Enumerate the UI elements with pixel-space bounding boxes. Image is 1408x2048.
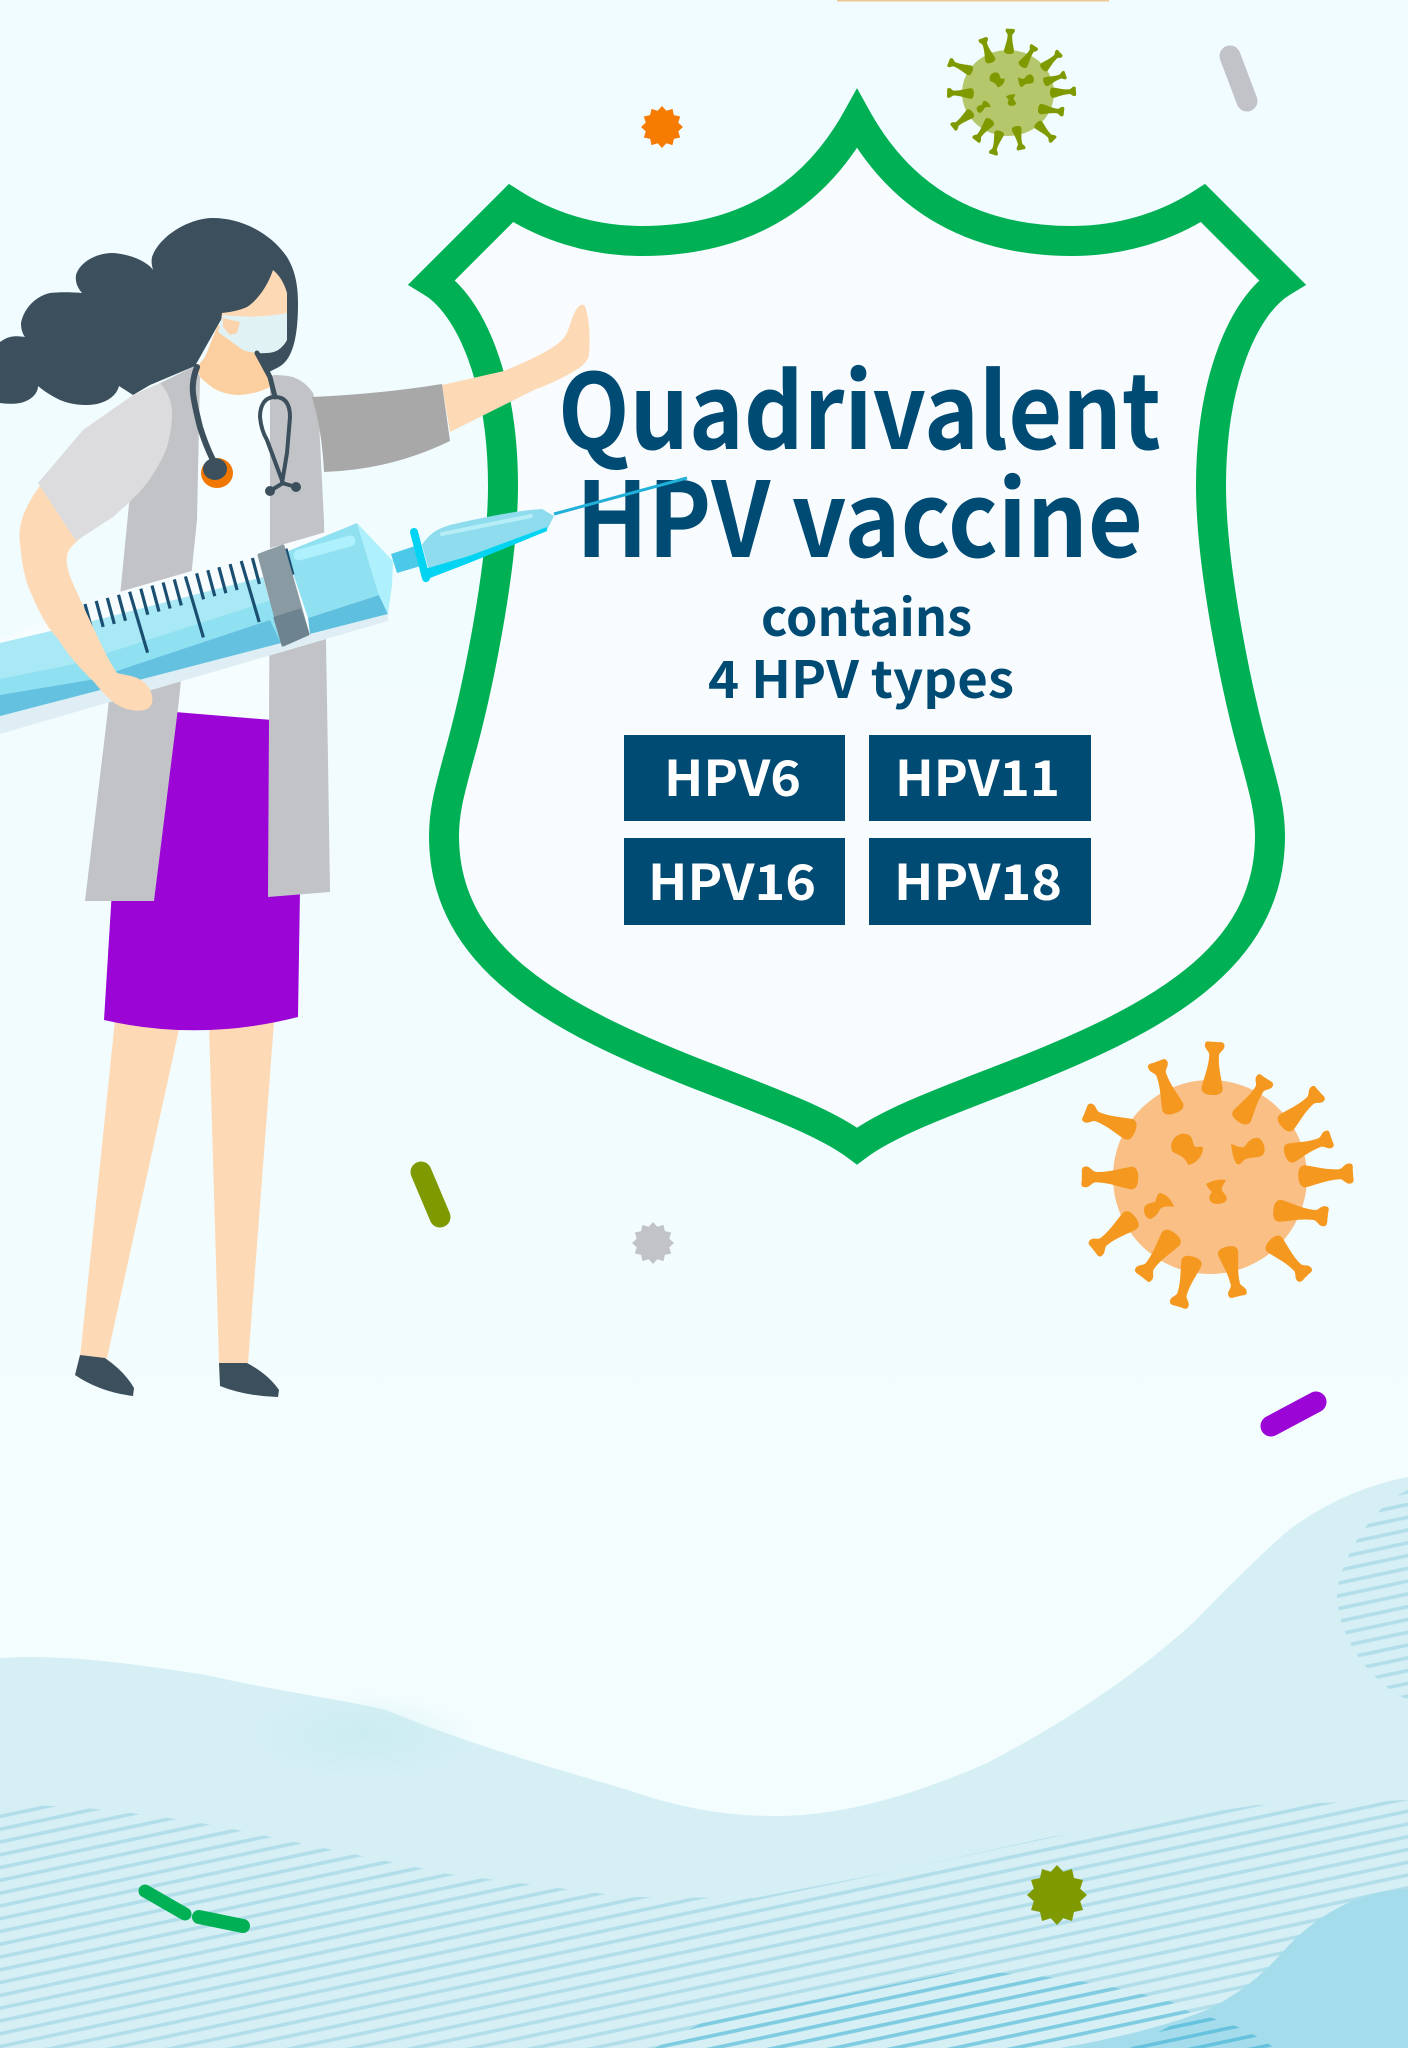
- particle: orange burst: [641, 106, 683, 148]
- plunger band: [259, 546, 308, 645]
- left sleeve: [38, 383, 172, 541]
- capsule: olive: [421, 1172, 440, 1217]
- HPV type box: HPV16: HPV16: [648, 844, 816, 915]
- subtitle: [708, 577, 1014, 713]
- skirt: [104, 707, 300, 1030]
- title: [558, 328, 1161, 587]
- background hills: [0, 1477, 1408, 2048]
- mask cheek: [223, 318, 240, 335]
- hair: [0, 218, 298, 405]
- HPV type box: HPV11: HPV11: [895, 740, 1060, 811]
- left arm: [19, 478, 152, 711]
- liquid left: [0, 577, 281, 716]
- cap: [357, 523, 393, 614]
- shirt: [175, 372, 272, 720]
- neck: [197, 325, 270, 395]
- title: HPV vaccine: [576, 436, 1143, 587]
- right arm: [442, 305, 590, 432]
- virus: large orange: [1081, 1041, 1354, 1310]
- subtitle: contains: [761, 577, 972, 651]
- ticks: [85, 549, 293, 653]
- HPV type box: HPV18: HPV18: [894, 844, 1062, 915]
- stethoscope: [193, 353, 296, 491]
- capsule: grey: [1230, 56, 1247, 101]
- legs: [80, 1020, 274, 1363]
- particle: olive burst: [1027, 1865, 1087, 1925]
- barrel: [0, 523, 390, 734]
- face: [220, 270, 287, 353]
- flange: [414, 532, 426, 578]
- particle: grey burst: [632, 1222, 674, 1264]
- doctor illustration: [0, 218, 687, 1397]
- title: Quadrivalent: [558, 328, 1161, 479]
- HPV type box: HPV6: HPV6: [664, 740, 801, 811]
- HPV type box: HPV16: [624, 838, 845, 925]
- HPV type box: HPV6: [624, 735, 845, 821]
- subtitle: 4 HPV types: [708, 639, 1014, 713]
- needle: [554, 478, 687, 514]
- mask: [218, 313, 287, 353]
- right sleeve: [312, 384, 450, 472]
- capsule: green left: [145, 1891, 185, 1914]
- capsule: green right: [199, 1917, 243, 1926]
- shoes: [75, 1355, 279, 1397]
- HPV type box: HPV18: [869, 838, 1091, 925]
- capsule: purple: [1271, 1402, 1316, 1426]
- hub: [422, 509, 554, 571]
- virus: small green: [947, 28, 1076, 156]
- shield: [432, 119, 1282, 1146]
- coat right panel: [268, 375, 330, 897]
- HPV type box: HPV11: [869, 735, 1091, 821]
- nozzle: [391, 545, 424, 573]
- coat left panel: [85, 366, 200, 901]
- liquid right: [286, 523, 379, 618]
- syringe: [0, 478, 687, 734]
